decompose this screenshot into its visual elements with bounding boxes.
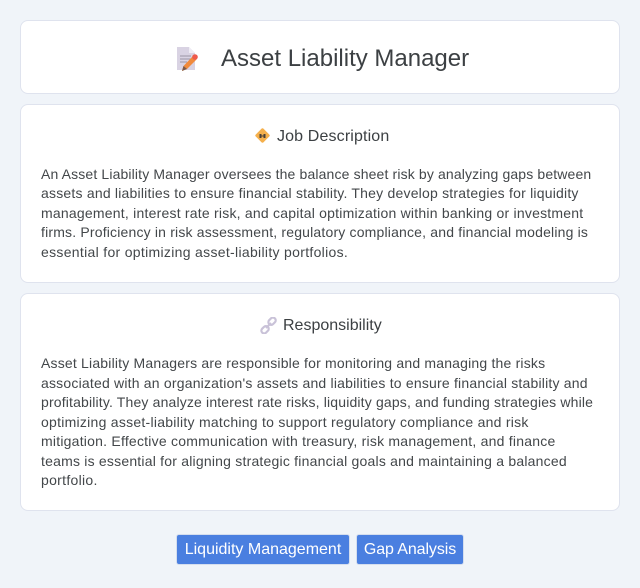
icon: document with pencil (177, 47, 198, 71)
heading: job description: Job Description (277, 128, 389, 145)
text: responsibility body: Asset Liability Managers are responsible for monitoring and managing the risks (41, 355, 545, 371)
heading: responsibility: Responsibility (283, 317, 382, 334)
panel: title (20, 20, 620, 94)
text: job description body: management, interest rate risk, and capital optimization within banking or investment (41, 205, 583, 221)
icon: chain link (260, 317, 277, 334)
text: job description body: assets and liabilities to ensure financial stability. They develop strategies for liquidity (41, 185, 579, 201)
text: responsibility body: profitability. They analyze interest rate risks, liquidity gaps, and funding strategies while (41, 394, 593, 410)
tag: liquidity management: Liquidity Management (185, 541, 341, 558)
tag: liquidity management (176, 534, 350, 565)
panel: responsibility: portfolio. (41, 472, 98, 488)
text: job description body: firms. Proficiency in risk assessment, regulatory compliance, and financial modeling is (41, 224, 588, 240)
tag: gap analysis: Gap Analysis (364, 541, 456, 558)
title text: Asset Liability Manager (221, 45, 469, 72)
text: responsibility body: optimizing asset-liability matching to support regulatory compliance and risk (41, 414, 529, 430)
text: responsibility body: mitigation. Effective communication with treasury, risk management, and finance (41, 433, 556, 449)
text: job description body (41, 166, 591, 260)
icon: diamond sign (255, 128, 270, 143)
text: job description body: essential for optimizing asset-liability portfolios. (41, 244, 348, 260)
text: job description body: An Asset Liability Manager oversees the balance sheet risk by analyzing gaps between (41, 166, 591, 182)
panel: job description (20, 104, 620, 283)
text: responsibility body (41, 355, 593, 488)
text: responsibility body: teams is essential for aligning strategic financial goals and maintaining a balanced (41, 453, 567, 469)
tag: gap analysis (356, 534, 464, 565)
text: responsibility body: associated with an organization's assets and liabilities to ensure financial stability and (41, 375, 588, 391)
panel: responsibility (20, 293, 620, 511)
